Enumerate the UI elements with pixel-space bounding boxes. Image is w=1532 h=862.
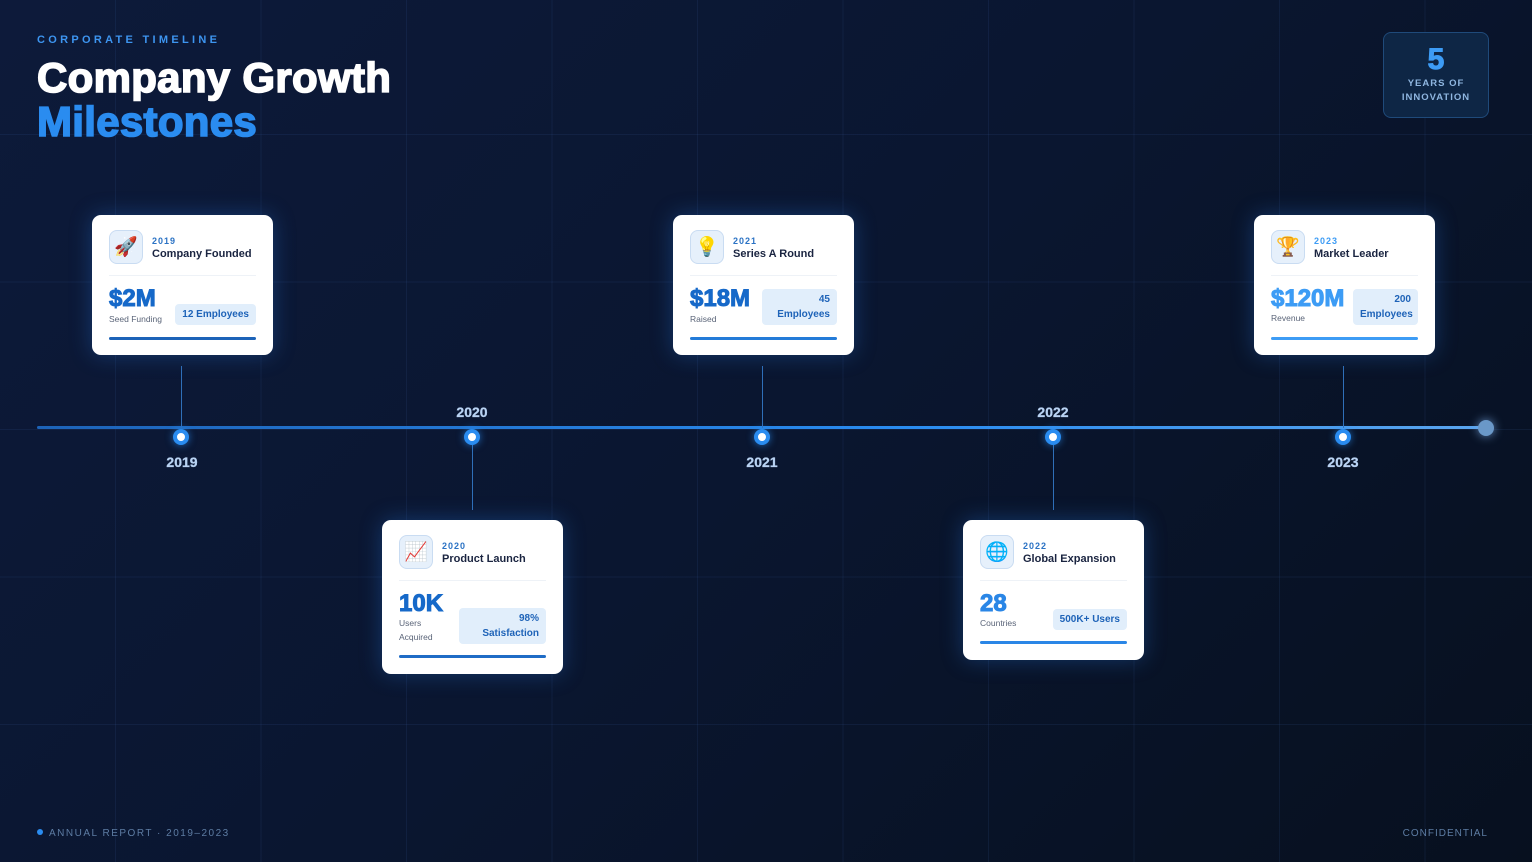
connectors xyxy=(181,366,182,428)
card: 2021 series A: 2021 xyxy=(733,236,757,246)
card: 2021 series A: Raised xyxy=(690,314,716,324)
axis end dot xyxy=(1478,420,1494,436)
text: 2021 xyxy=(746,454,778,470)
card: 2021 series A xyxy=(673,215,854,355)
card: 2022 global expansion: Countries xyxy=(980,618,1016,628)
card: 2023 market leader: 🏆 xyxy=(1276,237,1300,258)
card: 2020 product launch: Users xyxy=(399,618,421,628)
title xyxy=(37,54,391,145)
card: 2022 global expansion: 2022 xyxy=(1023,541,1047,551)
card: 2022 global expansion xyxy=(963,520,1144,660)
nodes xyxy=(173,429,189,445)
card: 2023 market leader: Market Leader xyxy=(1314,248,1389,260)
card: 2020 product launch: 📈 xyxy=(404,542,428,563)
card: 2023 market leader: 2023 xyxy=(1314,236,1338,246)
card: 2021 series A: Employees xyxy=(777,309,830,320)
card: 2023 market leader: Employees xyxy=(1360,309,1413,320)
card: 2020 product launch: 98% xyxy=(519,613,539,624)
card: 2020 product launch: Acquired xyxy=(399,632,433,642)
card: 2020 product launch: Satisfaction xyxy=(482,628,539,639)
card: 2021 series A: 💡 xyxy=(695,237,719,258)
footer right: CONFIDENTIAL xyxy=(1403,828,1488,839)
card: 2022 global expansion: Global Expansion xyxy=(1023,553,1116,565)
card: 2020 product launch: Product Launch xyxy=(442,553,526,565)
card: 2020 product launch xyxy=(382,520,563,674)
card: 2023 market leader: $120M xyxy=(1271,285,1344,312)
card: 2023 market leader: 200 xyxy=(1394,294,1411,305)
card: 2019 company founded: Seed Funding xyxy=(109,314,162,324)
card: 2019 company founded: 2019 xyxy=(152,236,176,246)
card: 2019 company founded: 12 Employees xyxy=(182,309,249,320)
timeline axis xyxy=(37,426,1487,429)
card: 2022 global expansion: 28 xyxy=(980,590,1007,617)
badge: 5 years of innovation: INNOVATION xyxy=(1402,92,1470,103)
footer left: ANNUAL REPORT · 2019–2023 xyxy=(49,828,230,839)
text: 2023 xyxy=(1327,454,1359,470)
card: 2022 global expansion: 500K+ Users xyxy=(1060,614,1120,625)
badge: 5 years of innovation xyxy=(1383,32,1489,118)
card: 2019 company founded: 🚀 xyxy=(114,237,138,258)
text: 2022 xyxy=(1037,404,1069,420)
eyebrow: corporate timeline: CORPORATE TIMELINE xyxy=(37,34,220,46)
card: 2021 series A: 45 xyxy=(819,294,830,305)
card: 2023 market leader xyxy=(1254,215,1435,355)
title: Company Growth xyxy=(37,54,391,101)
badge: 5 years of innovation: 5 xyxy=(1428,43,1444,76)
card: 2019 company founded xyxy=(92,215,273,355)
card: 2022 global expansion: 🌐 xyxy=(985,542,1009,563)
year labels: 2019 xyxy=(166,454,198,470)
text: 2020 xyxy=(456,404,488,420)
card: 2021 series A: $18M xyxy=(690,285,750,312)
card: 2019 company founded: $2M xyxy=(109,285,156,312)
card: 2020 product launch: 2020 xyxy=(442,541,466,551)
card: 2020 product launch: 10K xyxy=(399,590,443,617)
badge: 5 years of innovation: YEARS OF xyxy=(1408,78,1464,89)
card: 2023 market leader: Revenue xyxy=(1271,313,1305,323)
card: 2021 series A: Series A Round xyxy=(733,248,814,260)
title: Milestones xyxy=(37,98,257,145)
card: 2019 company founded: Company Founded xyxy=(152,248,252,260)
